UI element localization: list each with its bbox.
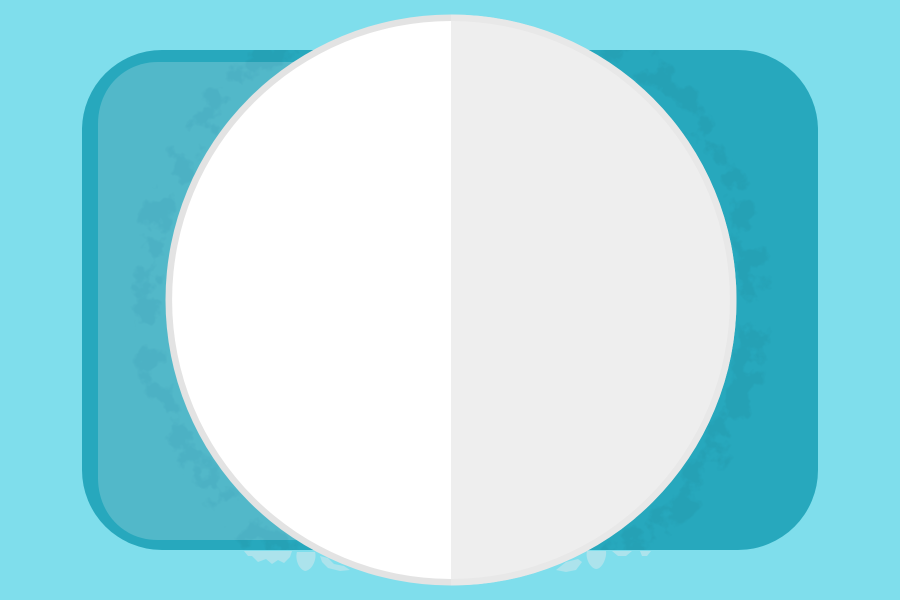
panel: dark teal rounded rectangle [82,50,818,550]
splatter: blotches on dark teal area [146,0,756,600]
splatter: blotches on lighter left panel [146,0,756,600]
splatter: pale drips below panel [244,551,651,572]
panel: lighter inner left rectangle [98,62,451,540]
circle: light grey right half [451,21,730,579]
circle: outer grey ring [166,14,736,586]
ring: lighter right half [451,14,736,586]
circle: white left half [172,21,451,579]
illustration [82,14,818,586]
